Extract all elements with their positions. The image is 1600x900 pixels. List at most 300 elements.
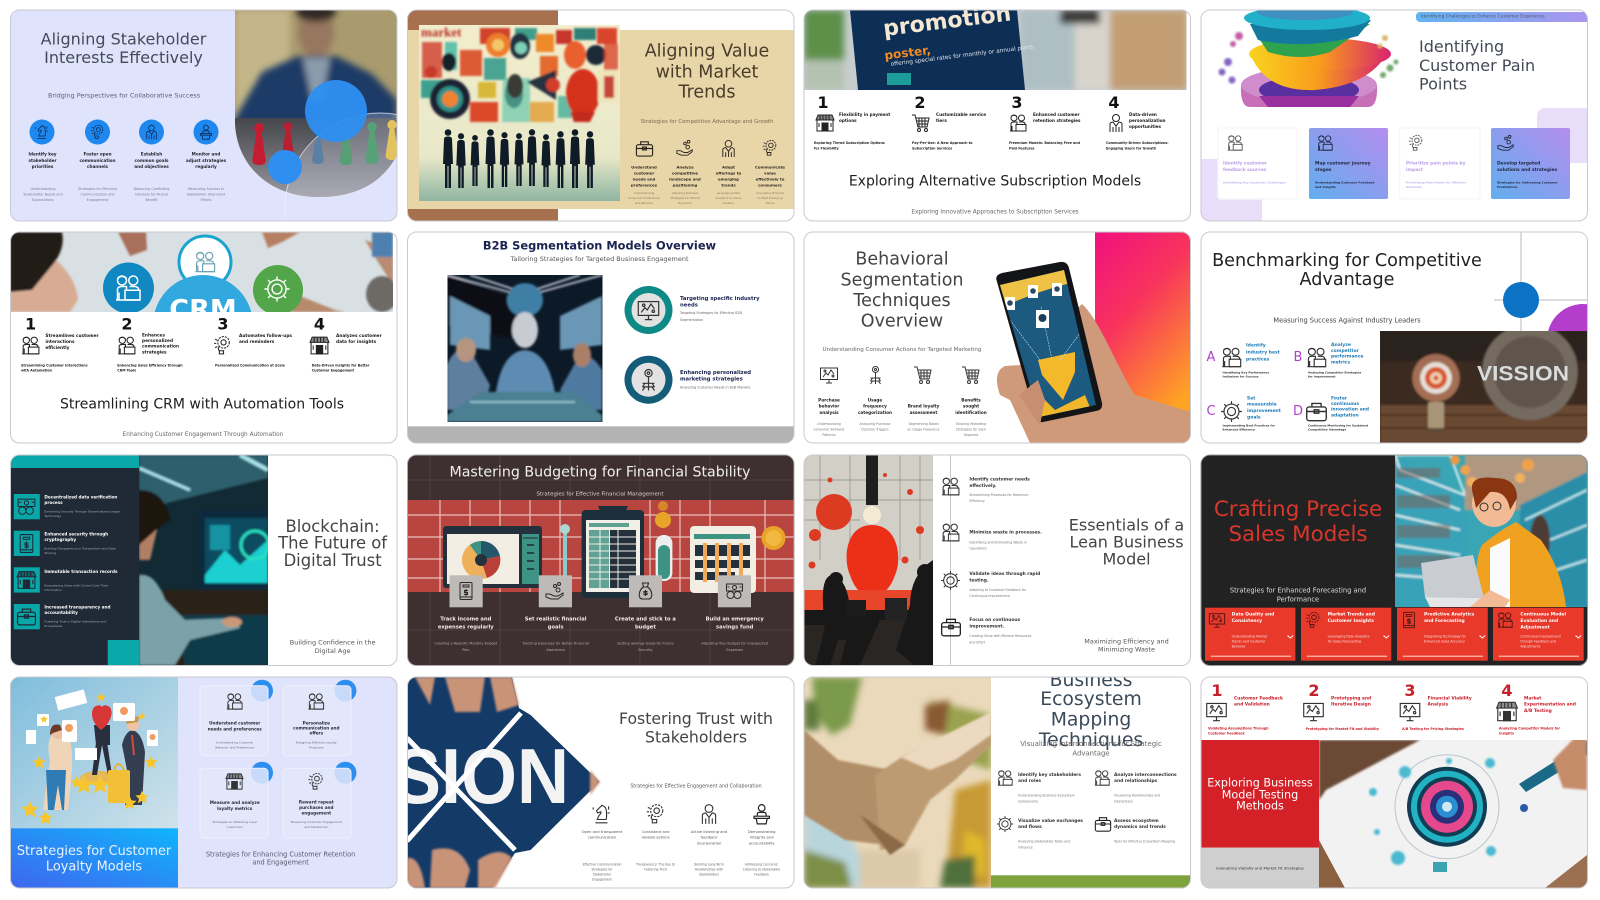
item headings: accountability [749,841,776,845]
item headings: Usage [868,397,882,402]
card: prioritize pain points: Prioritizing Pain Points for Effective [1406,181,1467,185]
item descriptions: for Flexibility [814,146,840,150]
item headings: common goals [134,157,169,162]
card: continuous evaluation: Evaluation and [1520,618,1558,624]
card: customer feedback sources: Identifying Key Customer Challenges [1223,181,1286,185]
gradient block [1095,232,1190,412]
item: cryptography: cryptography [44,536,76,542]
dark sidebar [10,455,139,666]
item: continuous improvement [969,616,1032,644]
item descriptions: Innovating Products [756,191,784,195]
item descriptions: Customer Engagement [312,369,355,373]
title: Segmentation [840,270,964,290]
item descriptions: Freemium Models: Balancing Free and [1009,141,1081,145]
item: transparency: accountability [44,610,78,614]
card: continuous evaluation: through Feedback and [1520,640,1556,644]
item descriptions [628,191,784,205]
photo: SION mosaic with hands [393,677,600,888]
item descriptions: Measuring Success in [188,187,224,191]
item headings: sought [963,403,979,408]
item descriptions: Validating Assumptions Through [1208,726,1269,730]
subtitle: Advantage [1072,750,1110,758]
item headings [1234,695,1576,714]
icon: customers [1010,115,1026,131]
item descriptions: Pay-Per-Use: A New Approach to [912,141,973,145]
item: validate ideas: Validate ideas through rapid [969,570,1040,576]
item headings: incorporation [697,841,722,845]
item headings: customer [634,170,654,175]
subtitle: Measuring Success Against Industry Leaders [1273,316,1421,324]
subtitle: Building Confidence in the [290,638,375,646]
item headings: Market [1524,695,1541,701]
header pill [1416,12,1600,22]
item: value exchanges: and flows [1018,824,1042,830]
photo: CRM diagram with people around a table [11,232,393,312]
item: continuous improvement: Creating Value with Minimal Resources [969,634,1032,638]
card: continuous evaluation: Adjustments [1520,645,1541,649]
item B: B [1294,350,1302,365]
item descriptions: Effective Communication [583,862,621,866]
title: Advantage [1300,270,1394,290]
panel: Aligning Value with Market Trends [407,10,795,221]
item: customer needs: effectively. [969,482,997,488]
item headings: Communicate [755,164,785,169]
title: Aligning Value [645,42,769,62]
item descriptions: Data-Driven Insights for Better [312,363,370,367]
item descriptions: Enhancing Sales Efficiency through [117,363,183,367]
icon: gear bulb [647,805,663,823]
icon: communicate value [763,140,776,155]
item: transparency [14,604,110,629]
glass card: needs and preferences: Understand customer [209,720,261,725]
item descriptions: Prototyping for Market Fit and Viability [1306,727,1380,731]
item descriptions: Dynamics [678,201,692,205]
item headings: Prototyping and [1331,695,1371,701]
item headings: Analyzes customer [336,332,383,338]
card: data quality: Data Quality and [1232,611,1274,617]
title: Business [1050,670,1132,690]
subtitle: Strategies for Competitive Advantage and Growth [641,119,773,125]
step numbers: 2 [914,93,926,112]
item descriptions: Efforts [200,198,212,202]
item A: industry best [1246,349,1281,355]
item headings: tiers [936,118,947,122]
item headings: options [839,118,857,122]
photo: stakeholder meeting with pawns [235,2,398,200]
poster: market collage and business silhouettes [419,24,620,201]
title: Essentials of a [1069,515,1184,534]
item headings: Enhances [142,332,165,338]
icon: monitor [820,368,838,383]
item headings: savings fund [716,624,754,630]
item: industry needs: Targeting Strategies for Effective B2B [679,311,743,315]
icon: person in suit [723,140,734,157]
icon: usage pin [870,366,880,384]
title: Sales Models [1228,522,1368,546]
item headings: competitive [672,170,698,175]
title: Points [1419,74,1467,93]
item B: metrics [1331,359,1350,365]
item: transparency: Increased transparency and [44,604,110,609]
subtitle: Enhancing Customer Engagement Through Automation [123,432,284,438]
item headings: Monitor and [192,151,220,156]
item headings: Create and stick to a [615,616,676,622]
item headings: goals [548,624,563,630]
card: data quality: Understanding Market [1232,635,1268,639]
item descriptions: Relationships with [695,868,723,872]
card: targeted solutions: Strategies for Addressing Customer [1497,181,1558,185]
item descriptions: Creating a Realistic Monthly Budget [434,642,498,646]
item: customer needs: Efficiency [969,499,985,503]
photo: business model diagram being drawn [1319,725,1588,888]
poster: market collage and business silhouettes: market [421,24,462,40]
item headings: efficiently [45,344,70,350]
title: Crafting Precise [1214,496,1382,522]
icon: storefront [1497,702,1517,721]
item: ecosystem dynamics: Tools for Effective Ecosystem Mapping [1113,839,1175,843]
card: targeted solutions: Frustrations [1497,185,1518,189]
item headings: feedback [701,836,718,840]
item C: improvement [1247,408,1282,414]
item headings: personalized [142,338,173,344]
title: Lean Business [1069,532,1184,551]
photo: analyst team with holographic screens [447,275,602,422]
item: decentralized verification: process [44,500,63,504]
item headings [631,164,785,187]
item headings: Data-driven [1129,112,1157,116]
title: The Future of [277,533,388,552]
glass card: reward repeat purchases: and Satisfaction [304,825,328,829]
title: Fostering Trust with [619,708,773,728]
item descriptions [23,187,226,202]
item headings: Analysis [1428,701,1448,707]
item descriptions: Strategies for Each [956,427,986,431]
item headings: Automates follow-ups [239,332,292,338]
item headings: Iterative Design [1331,701,1371,707]
item A: Identify [1246,342,1266,348]
glass card: personalize communication: offers [309,730,324,735]
item headings: Open and transparent [582,830,623,834]
item C: C [1206,404,1216,419]
card: prioritize pain points: Solutions [1406,185,1422,189]
item headings: Track income and [440,616,492,622]
item descriptions: Tracking Expenses for Better Financial [521,642,589,646]
title: Model [1102,549,1151,568]
item A: Identifying Key Performance [1222,370,1269,374]
panel: Strategies for Customer Loyalty Models [10,677,398,888]
item descriptions: Analytics for Value [715,196,742,200]
glass card: reward repeat purchases [283,768,351,838]
item descriptions: Consumer Preferences [628,196,660,200]
icon tile: money bag [629,575,662,607]
item descriptions: Listening to Stakeholder [743,868,781,872]
small blue circle [268,150,302,184]
title: Digital Trust [284,550,382,570]
item C: Implementing Best Practices for [1222,423,1276,427]
icon: monitor prototyping [1304,703,1323,721]
panel: Blockchain: The Future of Digital Trust [10,455,398,666]
item headings: identification [955,410,987,414]
item headings: Consistent and [642,830,669,834]
item B [1294,342,1363,378]
item: personalized marketing [680,370,751,389]
item descriptions: Stakeholder [593,873,612,877]
panel: Behavioral Segmentation Techniques Overview [804,232,1192,443]
card: market trends: Leveraging Data Analytics [1328,635,1370,639]
illustration: loyalty characters with stars [10,677,178,829]
item headings: stakeholder [28,157,57,162]
icon: gear [941,571,960,590]
title: Trends [677,83,736,103]
subtitle: Digital Age [315,647,350,655]
item headings: Flexibility in payment [839,112,890,116]
icon: suit [702,805,716,824]
item headings: integrity and [750,836,774,840]
item descriptions: Analyzing Competitor Models for [1499,726,1560,730]
item headings: Build an emergency [706,616,764,622]
title: Customer Pain [1419,56,1535,74]
item A [1207,342,1281,378]
item headings: Adapt [722,164,735,169]
item C: goals [1247,414,1261,420]
item: validate ideas [969,570,1040,598]
title: Aligning Stakeholder [41,29,207,48]
item headings [582,830,776,845]
step numbers: 4 [1501,681,1513,700]
title: with Market [656,62,759,82]
photo: promotion poster on a monitor: poster, [884,43,932,63]
item: cryptography: Enhanced security through [44,531,108,536]
item headings: Benefits [961,397,981,402]
glass circle overlay [284,112,396,220]
item: cryptography [14,531,116,556]
item descriptions: Community-Driven Subscriptions: [1106,141,1169,145]
subtitle: Bridging Perspectives for Collaborative Success [48,92,201,100]
icon: processes [942,524,959,541]
item: value exchanges [1018,818,1083,849]
photo: target light bulb on wood with VISSION sign [1380,324,1588,443]
title: Techniques [852,291,951,311]
item: decentralized verification: Technology [43,514,61,518]
item descriptions: Tailoring Marketing [955,422,986,426]
item descriptions: Streamlining Customer Interactions [21,363,88,367]
item D: adaptation [1331,412,1359,418]
card: customer feedback sources: Identify customer [1223,160,1268,166]
step numbers: 1 [1211,681,1223,700]
item descriptions: Understanding [31,187,55,191]
illustration: sales analyst with laptop in a store [1395,455,1588,607]
item headings: effectively to [756,176,785,181]
item descriptions: Personalized Communication at Scale [215,363,286,367]
item: validate ideas: Continuous Improvement [969,594,1011,598]
red title block: Exploring Business [1207,776,1313,789]
photo: CRM diagram with people around a table: CRM [169,294,237,326]
card: data quality [1205,608,1295,661]
item descriptions: Engagement [87,198,109,202]
item headings: assessment [910,410,937,414]
card: customer journey stages: stages [1315,166,1332,172]
item headings: data for insights [336,338,377,344]
step numbers: 1 [817,93,829,112]
subtitle: Tailoring Strategies for Targeted Business Engagement [509,255,689,263]
step numbers: 1 [25,314,36,334]
icon: chess knight [593,805,610,823]
title: Ecosystem [1040,688,1142,710]
photo: promotion poster on a monitor: offering special rates for monthly or annual plans, [890,44,1035,68]
step numbers [819,96,1119,108]
card: market trends: Customer Insights [1328,618,1374,624]
glass card: personalize communication: Designing Effective Loyalty [296,740,337,744]
card: continuous evaluation [1493,608,1584,661]
icon: cart [912,115,929,132]
item descriptions: Exploring Tiered Subscription Options [814,141,885,145]
item: minimize waste: Operations [969,547,987,551]
item A: Indicators for Success [1222,374,1259,378]
card: prioritize pain points: Prioritize pain points by [1406,160,1466,166]
item: personalized marketing: Analyzing Customer Needs in B2B Markets [680,385,751,389]
item descriptions: Security [638,648,653,652]
item: immutable records: Immutable transaction records [44,569,118,574]
header pill: Identifying Challenges to Enhance Customer Experience [1421,14,1545,20]
item: transparency: Ecosystems [44,624,63,628]
item headings: and reminders [239,338,275,344]
card: customer journey stages: and Insights [1315,185,1336,189]
item: ecosystem dynamics: dynamics and trends [1114,824,1166,830]
icon: storefront [310,337,329,354]
glass card: reward repeat purchases: purchases and [299,804,334,810]
icon: gear [997,816,1013,832]
item headings: Customizable service [936,112,986,116]
item descriptions: Fostering Trust [644,868,668,872]
subtitle: Minimizing Waste [1098,645,1155,653]
subtitle: Performance [1277,595,1319,603]
item descriptions: CRM Tools [117,369,136,373]
icon: stakeholder priorities [30,120,54,144]
item headings: communication [79,157,116,162]
photo: handshake over a world map [804,677,991,888]
item descriptions: Feedback [754,873,769,877]
item headings: offerings to [716,170,742,175]
item: validate ideas: Adapting to Customer Feedback for [969,588,1027,592]
item headings [28,151,227,168]
item: immutable records [14,567,118,593]
card: prioritize pain points [1400,128,1480,199]
item: transparency: Fostering Trust in Digital Interactions and [44,619,106,623]
item: stakeholders and roles [1018,772,1081,803]
icon: customers [22,337,39,354]
item: interconnections: Visualizing Relationships and [1114,793,1160,797]
glass card: loyalty metrics [200,768,268,838]
subtitle: Strategies for Effective Financial Management [537,491,664,497]
item D: Competitive Advantage [1308,427,1346,431]
step numbers: 2 [1308,681,1320,700]
item headings: preferences [631,182,658,187]
item descriptions: Benefit [145,198,158,202]
item: continuous improvement: and Effort [969,640,986,644]
item descriptions: Stakeholder Alignment [187,192,226,196]
item D: continuous [1331,400,1359,406]
item: ecosystem dynamics: Assess ecosystem [1114,818,1159,824]
icon: communication channels [85,120,110,144]
item: industry needs: Segmentation [680,318,703,322]
item descriptions: Strategies for Market [670,196,701,200]
item: ecosystem dynamics [1113,818,1175,843]
item: stakeholders and roles: and roles [1018,778,1041,784]
glass card: needs and preferences [200,686,268,756]
item headings: Streamlines customer [45,332,99,338]
glass card: loyalty metrics: Strategies for Retaining Loyal [212,820,257,824]
title: Overview [861,311,943,331]
item: personalized marketing: Enhancing personalized [680,370,751,376]
item descriptions: Building Long-Term [694,862,724,866]
footer band [407,426,795,443]
blue title block [10,828,178,888]
item: industry needs [679,296,760,322]
item descriptions: Addressing Concerns: [745,862,778,866]
glass card: reward repeat purchases: engagement [301,810,331,815]
icon badge: industry needs [624,286,672,334]
item C: Enhanced Efficiency [1222,427,1255,431]
item headings: regularly [195,163,217,168]
panel: Identifying Customer Pain Points [1195,4,1600,229]
item headings: expenses regularly [438,624,494,630]
item: minimize waste [969,530,1042,551]
item: continuous improvement: Focus on continuous [969,616,1021,622]
card: market trends [1301,608,1391,661]
item headings: opportunities [1129,124,1161,128]
item headings: adjust strategies [186,157,227,162]
red title block [1201,740,1319,848]
item headings: behavior [819,403,840,408]
card: customer feedback sources: feedback sources [1223,166,1267,172]
item descriptions: to Meet Emerging [758,196,783,200]
item: industry needs: Targeting specific industry [680,296,760,302]
item descriptions: Transparency: The Key to [635,862,675,866]
item descriptions [1208,726,1560,735]
item headings: analysis [819,410,839,414]
item headings: Analyze [676,164,694,169]
illustration: hand holding smartphone [990,262,1191,443]
item descriptions: Adjusting Your Budget for Unexpected [701,642,768,646]
item descriptions: Understanding [634,191,655,195]
item: value exchanges: Visualize value exchanges [1018,818,1083,824]
item descriptions: Creation [723,201,735,205]
icon: landscape analysis [677,140,692,155]
item: customer needs [969,476,1030,503]
item descriptions: Expenses [726,648,743,652]
item: decentralized verification: Decentralized data verification [44,494,117,499]
item headings: needs and [633,176,656,181]
title: Streamlining CRM with Automation Tools [60,396,344,412]
item headings: A/B Testing [1524,708,1552,714]
item descriptions: Interests for Mutual [135,192,168,196]
item: continuous improvement: improvement. [969,623,1004,629]
item headings: Experimentation and [1524,701,1576,707]
item headings: Customer Feedback [1234,695,1283,701]
illustration: lean team under a red light bulb [804,455,933,666]
panel: Essentials of a Lean Business Model [804,455,1192,666]
title: Benchmarking for Competitive [1212,251,1482,271]
item descriptions: Expectations [32,198,54,202]
item A: A [1207,350,1216,365]
illustration: layered funnel with foliage [1218,4,1398,107]
item headings: Brand loyalty [908,403,940,408]
title: Behavioral [855,249,949,269]
item: value exchanges: Influence [1018,845,1033,849]
title: Mastering Budgeting for Financial Stability [449,465,751,481]
step numbers: 3 [217,314,229,334]
item descriptions: on Usage Frequency [907,427,940,431]
